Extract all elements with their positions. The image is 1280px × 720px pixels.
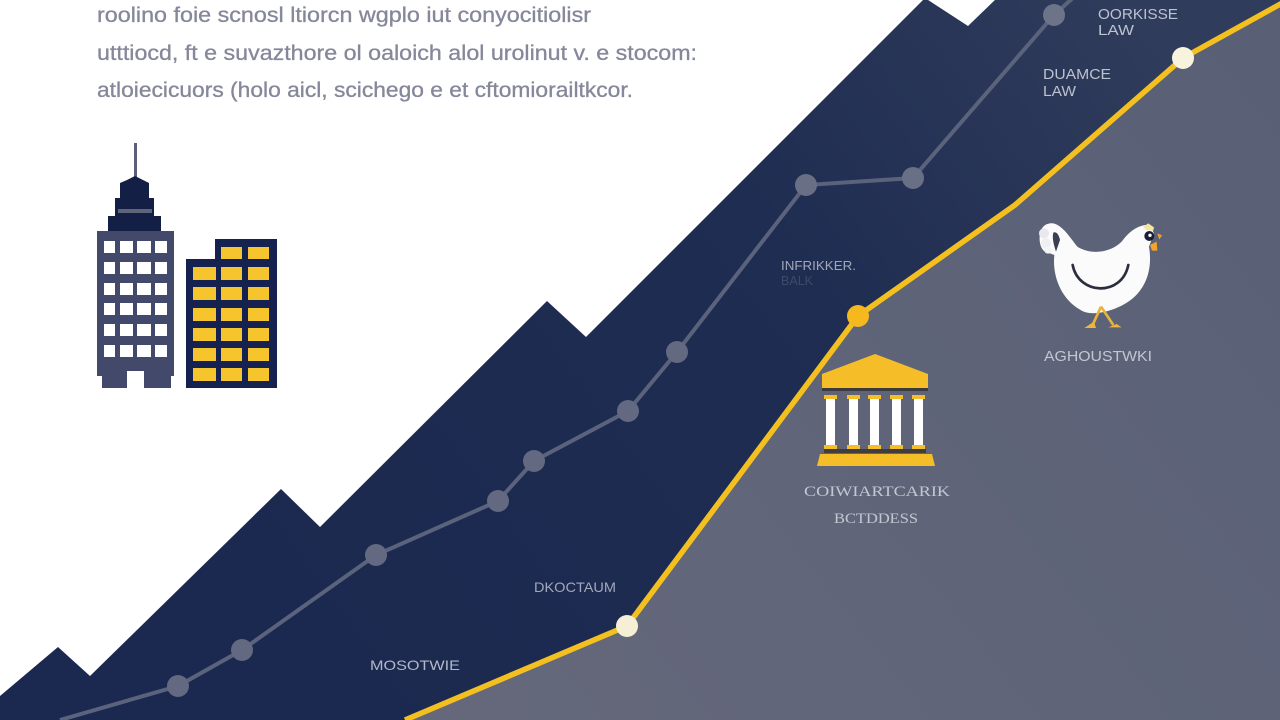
label: center [781, 258, 856, 288]
label: center: INFRIKKER. [781, 258, 856, 273]
intro text block [97, 4, 697, 102]
yellow line series with nodes [405, 2, 1280, 720]
label: finance law [1043, 66, 1111, 100]
label: lower center: DKOCTAUM [534, 579, 616, 595]
icon: bank [817, 354, 935, 466]
label: finance law: LAW [1043, 83, 1077, 100]
icon: city buildings [97, 143, 277, 388]
label: top right: OORKISSE [1098, 6, 1178, 23]
intro text block: utttiocd, ft e suvazthore ol oaloich alol urolinut v. e stocom: [97, 42, 697, 65]
label: top right: LAW [1098, 22, 1135, 39]
label: commercial bank [804, 484, 950, 527]
label: center: BALK [781, 273, 813, 288]
label: bottom left: MOSOTWIE [370, 657, 460, 673]
intro text block: roolino foie scnosl ltiorcn wgplo iut conyocitiolisr [97, 4, 591, 27]
icon: chicken [1039, 223, 1162, 328]
label: commercial bank: COIWIARTCARIK [804, 484, 950, 500]
office block [186, 239, 277, 388]
grey line series with nodes [60, 0, 1075, 720]
label: commercial bank: BCTDDESS [834, 511, 918, 527]
label: top right [1098, 6, 1178, 39]
tower [97, 143, 174, 388]
label: agriculture: AGHOUSTWKI [1044, 348, 1152, 365]
intro text block: atloiecicuors (holo aicl, scichego e et cftomiorailtkcor. [97, 79, 633, 102]
label: finance law: DUAMCE [1043, 66, 1111, 83]
slate area under yellow line [405, 4, 1280, 720]
